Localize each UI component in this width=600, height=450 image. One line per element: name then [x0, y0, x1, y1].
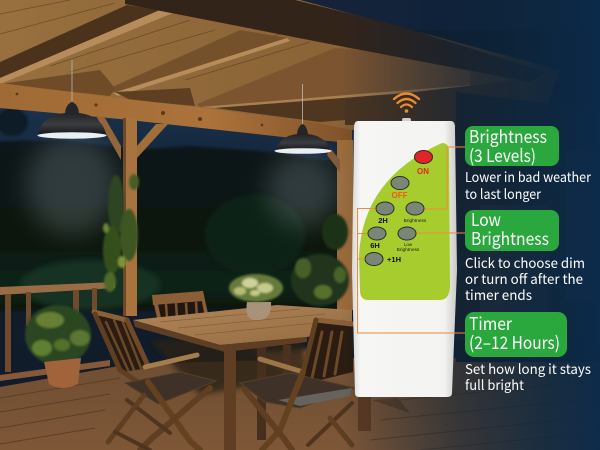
navy overlay on right side	[340, 0, 600, 450]
hanging lamp left	[26, 60, 118, 235]
dark top roof beam	[125, 0, 545, 82]
back chair	[152, 291, 209, 318]
climbing vine on post	[103, 174, 139, 292]
callout: Timer: Timer	[469, 311, 512, 336]
wood posts and braces	[96, 116, 353, 316]
potted plant	[25, 305, 91, 388]
callout: Low Brightness: Brightness	[471, 226, 549, 251]
callout: Timer	[465, 311, 567, 357]
Low Brightness button: Low	[404, 242, 413, 247]
callout: Brightness	[465, 124, 559, 168]
text: Timer description: full bright	[465, 374, 524, 394]
Brightness button: Brightness	[404, 218, 427, 224]
deck floor	[0, 350, 600, 450]
text: Brightness description	[465, 166, 592, 203]
callout: Brightness: Brightness	[469, 124, 547, 149]
text: Timer description: Set how long it stays	[465, 358, 591, 378]
building wall at right, dim	[456, 92, 600, 362]
text: Brightness description: to last longer	[465, 183, 542, 203]
Brightness button	[404, 202, 427, 224]
Low Brightness button	[397, 227, 420, 253]
remote body	[352, 121, 457, 397]
2H button: 2H	[378, 216, 388, 225]
green control panel	[359, 143, 450, 300]
Low Brightness button: Brightness	[397, 247, 420, 253]
connector lines	[358, 147, 465, 333]
text: Low Brightness description: timer ends	[465, 284, 532, 304]
right folding chair	[240, 320, 355, 450]
ceiling planks	[0, 0, 560, 130]
front header beam	[0, 83, 352, 143]
remote antenna tip	[402, 118, 411, 122]
text: Low Brightness description: or turn off after the	[465, 268, 583, 288]
+1H button	[365, 252, 401, 266]
+1H button: +1H	[387, 255, 401, 264]
6H button: 6H	[370, 241, 380, 250]
remote stand legs	[372, 398, 410, 413]
callout: Low Brightness: Low	[471, 207, 501, 232]
text: Low Brightness description: Click to choose dim	[465, 252, 585, 272]
text: Timer description	[465, 358, 591, 394]
callout: Brightness: (3 Levels)	[469, 143, 536, 168]
right side shrub	[291, 214, 349, 306]
remote control	[352, 118, 457, 397]
left folding chair	[94, 312, 216, 450]
dark under-table area	[150, 335, 310, 395]
ON button: ON	[417, 167, 429, 176]
callout: Timer: (2–12 Hours)	[469, 330, 560, 355]
flower vase	[229, 274, 283, 320]
6H button	[368, 227, 386, 250]
text: Brightness description: Lower in bad weather	[465, 166, 592, 186]
ceiling beams	[0, 5, 520, 125]
2H button	[376, 202, 394, 225]
hanging lamp right	[267, 84, 339, 228]
callout: Low Brightness	[465, 207, 559, 251]
OFF button: OFF	[392, 191, 408, 200]
table leg behind remote	[358, 395, 371, 431]
ON button	[414, 150, 432, 176]
text: Low Brightness description	[465, 252, 585, 304]
deck railing	[0, 282, 115, 381]
dining table	[133, 305, 352, 450]
icon: orange wifi signal	[394, 94, 419, 113]
OFF button	[391, 176, 409, 200]
